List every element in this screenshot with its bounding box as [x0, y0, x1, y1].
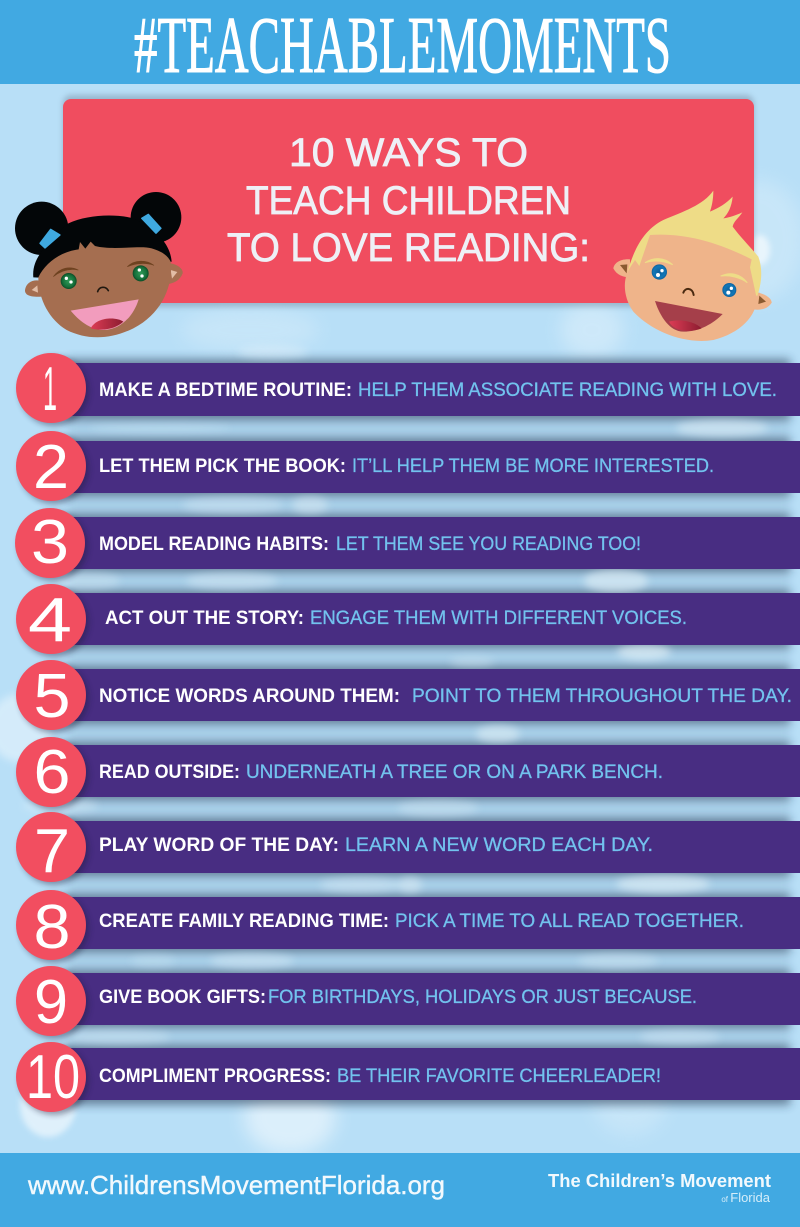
bar 10: COMPLIMENT PROGRESS:	[99, 1066, 331, 1087]
bar 3	[70, 517, 800, 569]
badge 2: 2	[33, 433, 69, 502]
badge 5	[16, 660, 89, 733]
bar 9	[70, 973, 800, 1025]
badge 6	[16, 737, 89, 810]
bar 9: GIVE BOOK GIFTS:	[99, 987, 266, 1008]
badge 1: 1	[43, 355, 57, 424]
badge 3: 3	[31, 508, 69, 577]
bar 1	[70, 363, 800, 416]
bar 8: CREATE FAMILY READING TIME:	[99, 911, 389, 932]
bar 1: MAKE A BEDTIME ROUTINE:	[99, 380, 352, 401]
bar 6: UNDERNEATH A TREE OR ON A PARK BENCH.	[246, 762, 663, 783]
badge 8	[16, 890, 89, 963]
badge 7	[16, 812, 89, 886]
bar 4: ENGAGE THEM WITH DIFFERENT VOICES.	[310, 608, 687, 629]
badge 1	[16, 353, 89, 426]
header band	[0, 0, 800, 84]
bar 2: IT’LL HELP THEM BE MORE INTERESTED.	[352, 456, 714, 477]
badge 2	[16, 431, 89, 504]
bar 1: HELP THEM ASSOCIATE READING WITH LOVE.	[358, 380, 777, 401]
footer url: www.ChildrensMovementFlorida.org	[27, 1170, 445, 1200]
bar 2: LET THEM PICK THE BOOK:	[99, 456, 346, 477]
footer band	[0, 1153, 800, 1227]
bar 4	[70, 593, 800, 645]
bar 5: POINT TO THEM THROUGHOUT THE DAY.	[412, 686, 792, 707]
bar 3: LET THEM SEE YOU READING TOO!	[336, 534, 641, 555]
badge 6: 6	[34, 738, 70, 807]
bar 4: ACT OUT THE STORY:	[105, 608, 304, 629]
badge 3	[15, 508, 88, 581]
badge 7: 7	[34, 817, 70, 886]
bar 10: BE THEIR FAVORITE CHEERLEADER!	[337, 1066, 661, 1087]
heading line 1: 10 WAYS TO	[289, 131, 528, 175]
bar 10	[70, 1048, 800, 1100]
bar 5	[70, 669, 800, 721]
bar 8: PICK A TIME TO ALL READ TOGETHER.	[395, 911, 744, 932]
badge 8: 8	[34, 893, 70, 962]
footer logo	[548, 1171, 771, 1205]
badge 4	[16, 584, 89, 657]
heading line 3: TO LOVE READING:	[227, 226, 590, 270]
bar 6: READ OUTSIDE:	[99, 762, 240, 783]
icon: girl face	[15, 192, 183, 337]
bar 8	[70, 897, 800, 949]
footer logo: of Florida	[721, 1190, 771, 1205]
bar 6	[70, 745, 800, 797]
bar 7	[70, 821, 800, 873]
band backdrop with shadows	[22, 345, 790, 1108]
bar 9: FOR BIRTHDAYS, HOLIDAYS OR JUST BECAUSE.	[268, 987, 697, 1008]
badge 5: 5	[34, 662, 70, 731]
icon: boy face	[613, 191, 772, 341]
number badges	[15, 353, 89, 1115]
footer logo: The Children’s Movement	[548, 1171, 771, 1191]
bar 7: LEARN A NEW WORD EACH DAY.	[345, 835, 653, 856]
bar 3: MODEL READING HABITS:	[99, 534, 329, 555]
badge 9: 9	[34, 968, 68, 1037]
bar 2	[70, 441, 800, 493]
heading line 2: TEACH CHILDREN	[246, 179, 571, 223]
bar 7: PLAY WORD OF THE DAY:	[99, 835, 339, 856]
badge 9	[16, 966, 89, 1039]
bar 5: NOTICE WORDS AROUND THEM:	[99, 686, 400, 707]
panel: headline	[63, 95, 754, 307]
badge 4: 4	[28, 586, 72, 655]
badge 10: 10	[26, 1043, 80, 1112]
